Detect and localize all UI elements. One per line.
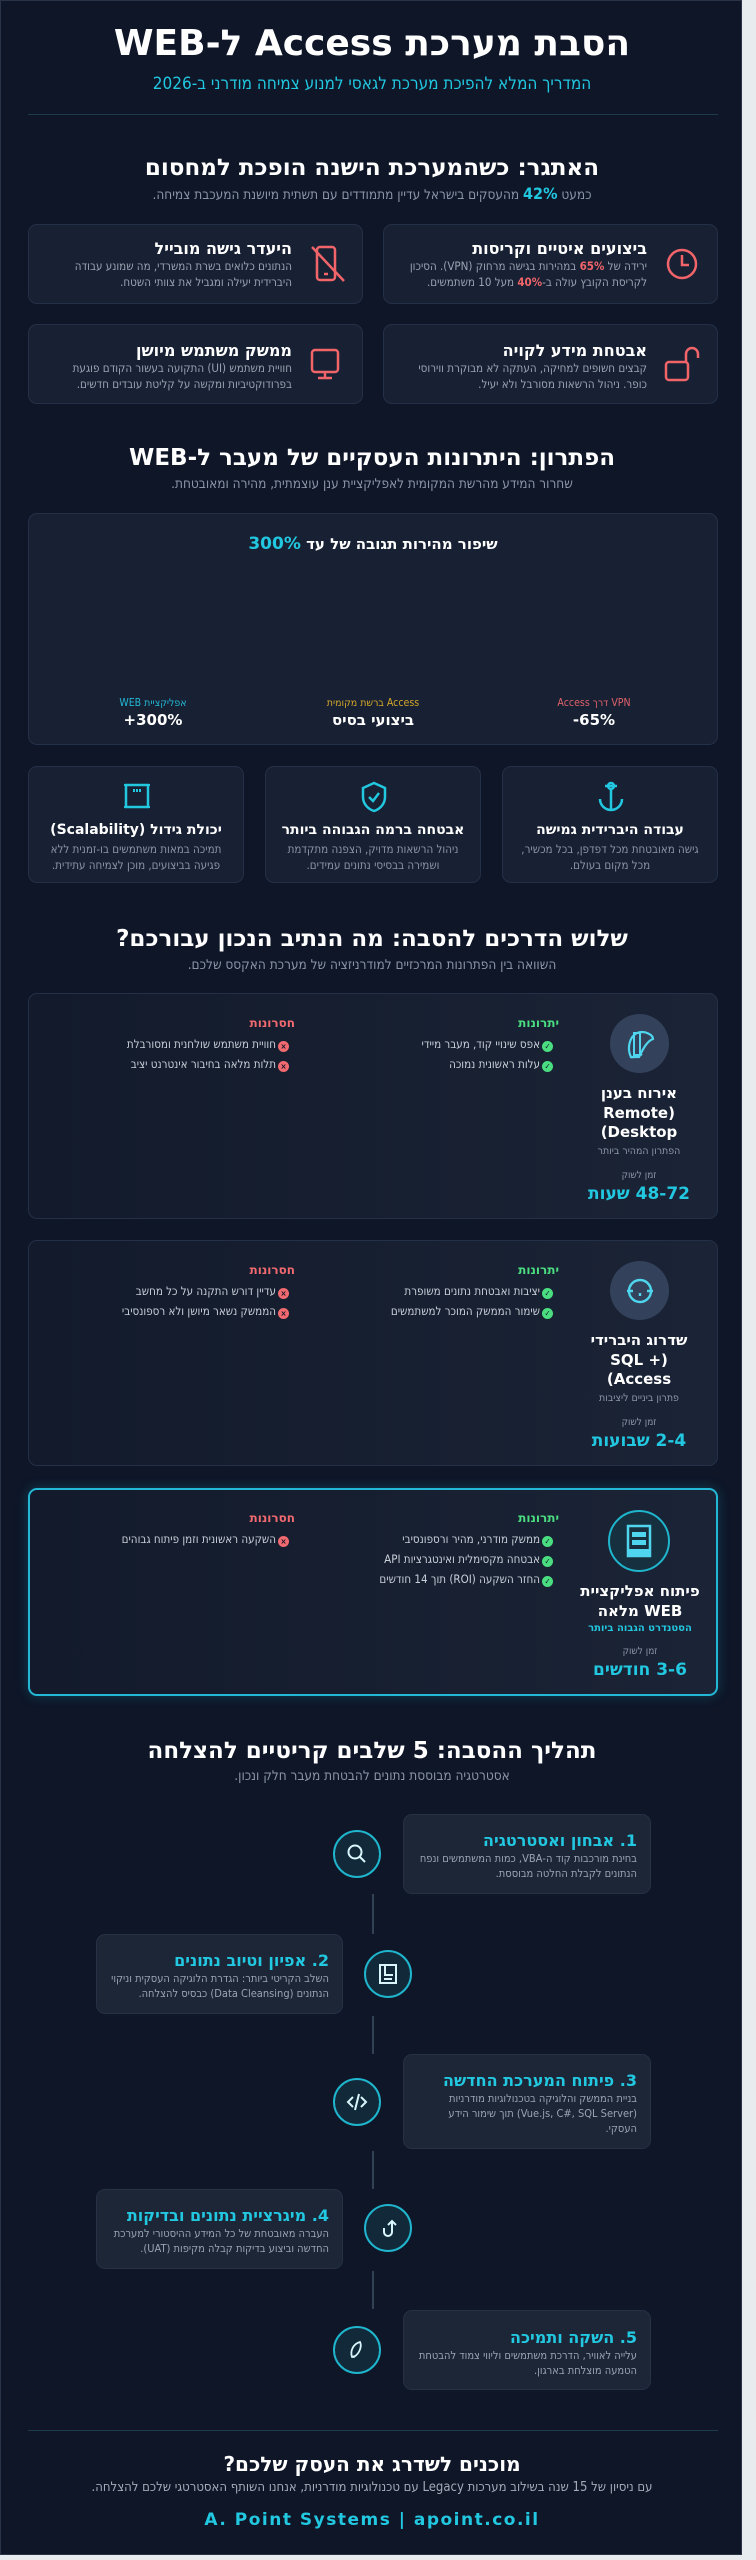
icon: shield — [362, 782, 386, 812]
option title: שדרוג היברידי — [591, 1331, 687, 1349]
pros list: עלות ראשונית נמוכה — [449, 1057, 540, 1071]
cons list — [122, 1263, 295, 1319]
text: no mobile: הנתונים כלואים בשרת המשרדי, מה שמונע עבודה היברידית יעילה ומגביל את צוותי השטח. — [75, 259, 292, 288]
text: poor security: קבצים חשופים למחיקה, העתקה לא מבוקרת ווירוסי כופר. ניהול הרשאות מסורבל ולא יעיל. — [418, 361, 647, 390]
option title: Remote) — [603, 1104, 675, 1122]
pros list: ✓ — [544, 1537, 551, 1546]
chart panel: response speed — [28, 513, 718, 745]
text: outdated UI: ממשק משתמש מיושן — [136, 341, 292, 360]
pros list — [391, 1263, 559, 1319]
option title: זמן לשוק — [622, 1170, 656, 1180]
cons list: × — [280, 1289, 287, 1298]
step 5 box: 5. השקה ותמיכה — [510, 2328, 637, 2347]
process subtext: אסטרטגיה מבוססת נתונים להבטחת מעבר חלק ונכון. — [234, 1768, 510, 1784]
icon: migrate arrow — [364, 2204, 412, 2252]
icon: monitor — [310, 348, 340, 380]
pros list: ✓ — [544, 1042, 551, 1051]
heading: challenge: האתגר: כשהמערכת הישנה הופכת למחסום — [145, 155, 599, 181]
pros list: ✓ — [544, 1062, 551, 1071]
pros list: ✓ — [544, 1577, 551, 1586]
title: הסבת מערכת Access ל-WEB — [114, 23, 630, 64]
option title — [591, 1331, 688, 1450]
panel: scalability: תמיכה במאות משתמשים בו-זמנית ללא פגיעה בביצועים, מוכן לצמיחה עתידית. — [51, 842, 221, 872]
step 1 box — [403, 1814, 651, 1894]
option title: זמן לשוק — [623, 1646, 657, 1657]
brand: A. Point Systems | apoint.co.il — [204, 2510, 540, 2530]
icon: phone crossed — [311, 246, 345, 282]
cons list: חוויית משתמש שולחנית ומסורבלת — [127, 1037, 276, 1051]
icon: web app — [608, 1510, 670, 1572]
bar label: web — [119, 697, 187, 729]
cons list: × — [280, 1537, 287, 1546]
option title — [580, 1582, 700, 1680]
bar label: local: ביצועי בסיס — [332, 711, 414, 729]
panel: hybrid work — [502, 766, 718, 883]
icon: anchor — [598, 782, 624, 812]
panel: outdated UI — [28, 324, 363, 404]
pros list: ✓ — [544, 1289, 551, 1298]
panel: no mobile — [28, 224, 363, 304]
heading: solution: הפתרון: היתרונות העסקיים של מעבר ל-WEB — [129, 445, 615, 471]
icon: search — [333, 1830, 381, 1878]
cons list: × — [280, 1062, 287, 1071]
bar label: local — [326, 697, 419, 729]
step 3 box: 3. פיתוח המערכת החדשה — [443, 2071, 637, 2090]
icon: remote desktop — [610, 1014, 669, 1073]
cons list: × — [280, 1042, 287, 1051]
text: poor security: אבטחת מידע לקויה — [503, 341, 647, 360]
panel: security: אבטחה ברמה הגבוהה ביותר — [282, 822, 464, 838]
step 2 box: השלב הקריטי ביותר: הגדרת הלוגיקה העסקית וניקוי הנתונים (Data Cleansing) כבסיס להצלחה. — [111, 1972, 329, 2000]
panel: remote desktop — [28, 993, 718, 1219]
pros list: ממשק מודרני, מהיר ורספונסיבי — [402, 1532, 540, 1546]
cons list: חסרונות — [250, 1016, 295, 1030]
footer heading: מוכנים לשדרג את העסק שלכם? — [223, 2452, 521, 2476]
icon: unlocked padlock — [664, 346, 700, 382]
step 4 box: העברה מאובטחת של כל המידע ההיסטורי למערכת החדשה וביצוע בדיקות קבלה מקיפות (UAT). — [114, 2227, 329, 2255]
bar label: VPN: 65%- — [573, 711, 615, 729]
cons list: הממשק נשאר מיושן ולא רספונסיבי — [122, 1304, 276, 1318]
subtitle: המדריך המלא להפיכת מערכת לגאסי למנוע צמיחה מודרני ב-2026 — [153, 74, 591, 94]
solution subtext: שחרור המידע מהרשת המקומית לאפליקציית ענן עוצמתית, מהירה ומאובטחת. — [171, 476, 573, 492]
option title: פתרון ביניים ליציבות — [599, 1392, 679, 1404]
cons list: חסרונות — [250, 1511, 295, 1525]
option title: הפתרון המהיר ביותר — [598, 1144, 680, 1156]
step 4 box — [96, 2189, 343, 2269]
step 3 box — [403, 2054, 651, 2149]
pros list: ✓ — [544, 1309, 551, 1318]
icon: server box — [124, 784, 150, 808]
panel: scalability — [28, 766, 244, 883]
cons list — [126, 1016, 295, 1072]
text: slow performance: ירידה של 65% במהירות בגישה מרחוק (VPN). הסיכון לקריסת הקובץ עולה ב-40% מעל 10 משתמשים. — [410, 259, 647, 288]
text: slow performance: ביצועים איטיים וקריסות — [472, 239, 647, 258]
panel: poor security — [383, 324, 718, 404]
option title: 48-72 שעות — [588, 1184, 690, 1204]
option title: זמן לשוק — [622, 1416, 656, 1428]
step 5 box: עלייה לאוויר, הדרכת משתמשים וליווי צמוד להבטחת הטמעה מוצלחת בארגון. — [419, 2349, 637, 2377]
pros list: שימור הממשק המוכר למשתמשים — [391, 1304, 540, 1318]
pros list: אבטחה מקסימלית ואינטגרציות API — [384, 1552, 540, 1566]
icon: data — [364, 1950, 412, 1998]
pros list: אפס שינויי קוד, מעבר מיידי — [422, 1037, 540, 1051]
chart title: שיפור מהירות תגובה של עד 300% — [248, 534, 498, 554]
cons list: תלות מלאה בחיבור אינטרנט יציב — [131, 1057, 276, 1071]
text: no mobile — [75, 239, 292, 288]
panel: slow performance — [383, 224, 718, 304]
panel: scalability: יכולת גידול (Scalability) — [50, 822, 222, 838]
bar label: web: אפליקציית WEB — [119, 697, 187, 709]
three paths subtext: השוואה בין הפתרונות המרכזיים למודרניזציה של מערכת האקסס שלכם. — [188, 957, 556, 973]
pros list: החזר השקעה (ROI) תוך 14 חודשים — [379, 1572, 540, 1586]
text: outdated UI — [72, 341, 292, 390]
pros list: יציבות ואבטחת נתונים משופרת — [404, 1284, 540, 1298]
text: slow performance — [410, 239, 647, 288]
step 5 box — [403, 2310, 651, 2390]
option title: אירוח בענן — [601, 1084, 677, 1102]
pros list — [422, 1016, 559, 1072]
option title: (Access — [607, 1370, 671, 1388]
panel: security — [265, 766, 481, 883]
text: poor security — [418, 341, 647, 390]
panel: full web app (highlighted) — [28, 1488, 718, 1696]
step 2 box: 2. אפיון וטיוב נתונים — [174, 1951, 329, 1970]
bar label: web: 300%+ — [124, 711, 182, 729]
step 3 box: בניית הממשק והלוגיקה בטכנולוגיות מודרניות (Vue.js, C#, SQL Server) תוך שימור הידע העסקי. — [448, 2092, 637, 2135]
cons list: השקעה ראשונית וזמן פיתוח גבוהים — [122, 1532, 276, 1546]
cons list: עדיין דורש התקנה על כל מחשב — [136, 1284, 276, 1298]
option title — [588, 1084, 690, 1204]
pros list: יתרונות — [518, 1511, 559, 1525]
footer text: עם ניסיון של 15 שנה בשילוב מערכות Legacy עם טכנולוגיות מודרניות, אנחנו השותף האסטרטגי שלכם להצלחה. — [92, 2480, 652, 2495]
text: outdated UI: חוויית משתמש (UI) התקועה בעשור הקודם פוגעת בפרודוקטיביות ומקשה על קליטת עובדים חדשים. — [73, 361, 292, 390]
icon: hybrid — [610, 1261, 669, 1320]
icon: rocket — [333, 2326, 381, 2374]
option title: הסטנדרט הגבוה ביותר — [588, 1623, 692, 1634]
step 4 box: 4. מיגרציית נתונים ובדיקות — [127, 2206, 329, 2225]
panel: hybrid SQL — [28, 1240, 718, 1466]
icon: clock — [666, 248, 698, 280]
text: no mobile: היעדר גישה מובייל — [155, 239, 292, 258]
cons list: חסרונות — [250, 1263, 295, 1277]
option title: (Desktop — [601, 1123, 677, 1141]
cons list — [122, 1511, 295, 1547]
option title: WEB מלאה — [598, 1602, 682, 1620]
icon: code — [333, 2078, 381, 2126]
pros list: ✓ — [544, 1557, 551, 1566]
cons list: × — [280, 1309, 287, 1318]
pros list — [379, 1511, 559, 1587]
panel: hybrid work: עבודה היברידית גמישה — [536, 822, 684, 838]
pros list: יתרונות — [518, 1263, 559, 1277]
heading: process: תהליך ההסבה: 5 שלבים קריטיים להצלחה — [148, 1738, 596, 1764]
step 2 box — [96, 1934, 343, 2014]
bar label: VPN: VPN דרך Access — [557, 697, 631, 709]
step 1 box: 1. אבחון ואסטרטגיה — [483, 1831, 637, 1850]
option title: פיתוח אפליקציית — [580, 1582, 700, 1600]
bar label: local: Access ברשת מקומית — [327, 697, 419, 709]
panel: security: ניהול הרשאות מדויק, הצפנה מתקדמת ושמירה בבסיסי נתונים עמידים. — [288, 842, 458, 872]
heading: three paths: שלוש הדרכים להסבה: מה הנתיב הנכון עבורכם? — [116, 926, 628, 952]
panel: hybrid work: גישה מאובטחת מכל דפדפן, בכל מכשיר, מכל מקום בעולם. — [521, 842, 699, 872]
challenge subtext: כמעט 42% מהעסקים בישראל עדיין מתמודדים עם תשתית מיושנת המעכבת צמיחה. — [152, 184, 592, 203]
option title: 3-6 חודשים — [593, 1660, 687, 1680]
pros list: יתרונות — [518, 1016, 559, 1030]
option title: 2-4 שבועות — [592, 1430, 686, 1450]
bar label: VPN — [557, 697, 631, 729]
step 1 box: בחינת מורכבות קוד ה-VBA, כמות המשתמשים ונפח הנתונים לקבלת החלטה מבוססת. — [420, 1852, 637, 1880]
option title: SQL +) — [610, 1350, 668, 1368]
